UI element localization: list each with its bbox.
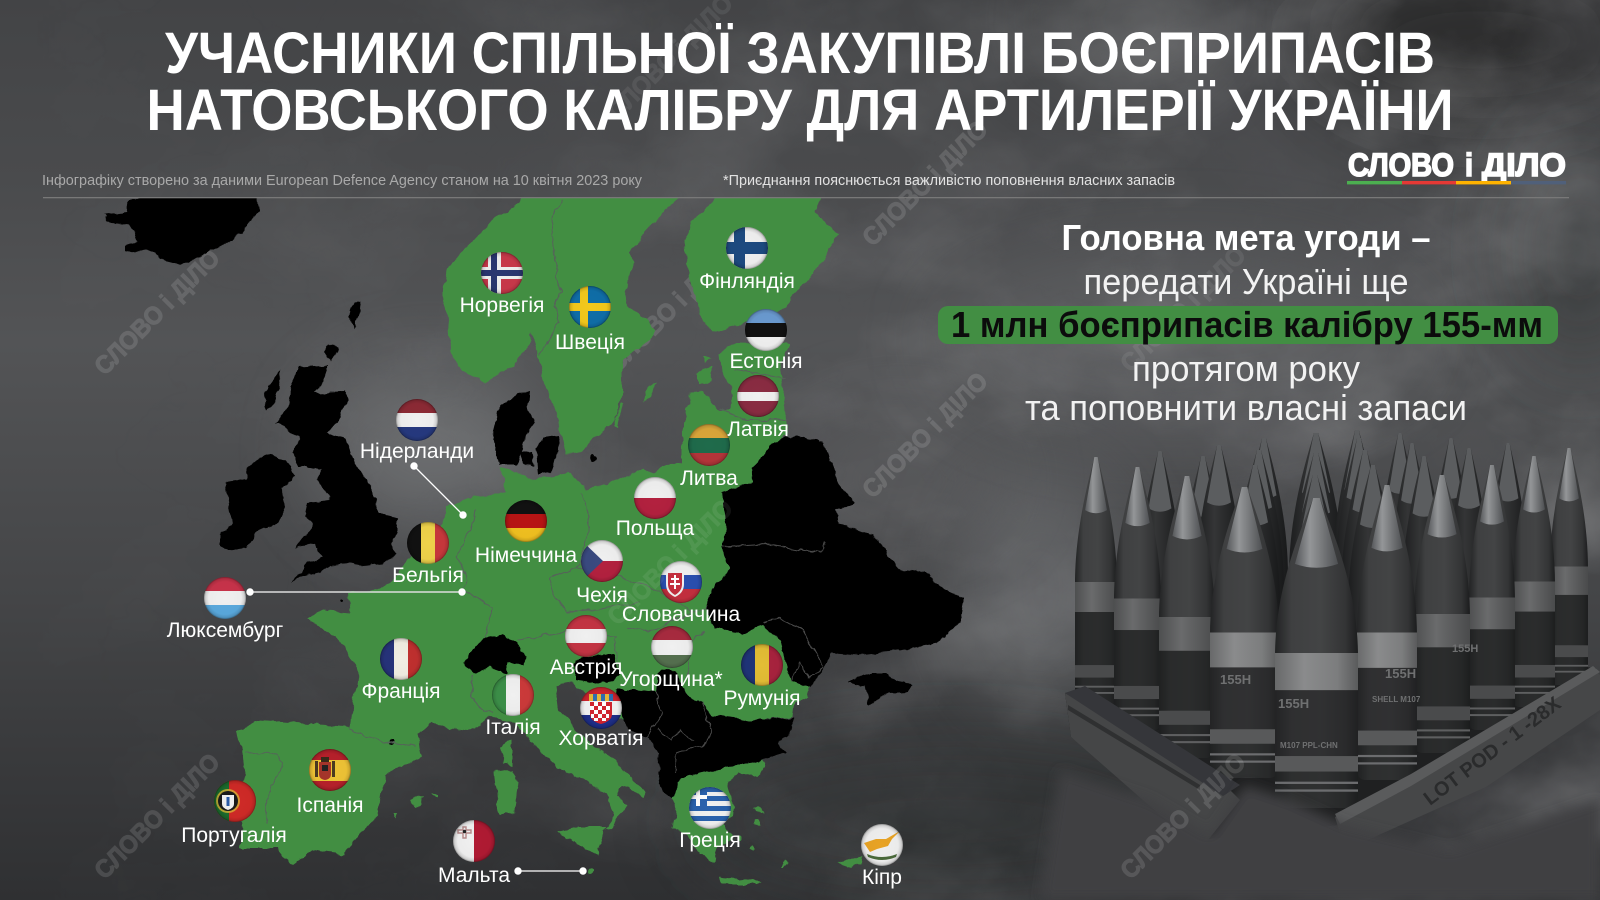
country: Угорщина: Угорщина* (619, 668, 723, 691)
back rows of shells (1138, 430, 1528, 755)
country: Нідерланди (360, 399, 474, 463)
country: Мальта (438, 820, 510, 887)
watermarks: СЛОВО і ДІЛО (857, 367, 994, 504)
country: Люксембург (167, 577, 284, 642)
country: Литва: Литва (680, 467, 738, 490)
shell markings: SHELL M107 (1372, 695, 1421, 704)
country: Чехія (578, 540, 626, 602)
watermarks over map and image: СЛОВО і ДІЛО (602, 494, 739, 631)
country: Люксембург: Люксембург (167, 619, 284, 642)
highlight: 1 млн боєприпасів: 1 млн боєприпасів калібру 155-мм (951, 304, 1543, 345)
logo: Слово і Діло: СЛОВО (1348, 147, 1454, 183)
shell markings: 155H (1220, 672, 1251, 687)
country: Польща (616, 477, 695, 540)
country: Хорватія: Хорватія (559, 727, 643, 750)
connector: Люксембург (246, 588, 466, 596)
country: Словаччина: Словаччина (622, 603, 740, 626)
country: Нідерланди: Нідерланди (360, 440, 474, 463)
country: Кіпр: Кіпр (862, 866, 902, 889)
image: artillery shells in crate (1040, 430, 1600, 900)
callout: main goal (938, 217, 1558, 428)
country: Бельгія (394, 522, 462, 582)
country: Німеччина: Німеччина (475, 544, 577, 567)
country: Норвегія: Норвегія (460, 294, 544, 317)
title: НАТОВСЬКОГО КАЛІБРУ ДЛЯ АРТИЛЕРІЇ УКРАЇНИ (146, 78, 1454, 143)
logo: Слово і Діло: ДІЛО (1482, 147, 1566, 183)
country: Словаччина (622, 561, 740, 626)
country: Італія: Італія (485, 716, 541, 739)
logo: Слово і Діло (1347, 147, 1566, 184)
shell markings: 155H (1278, 696, 1309, 711)
crate marking: LOT POD - 1 -28X (1420, 692, 1566, 810)
country: Іспанія (298, 749, 362, 812)
title: УЧАСНИКИ СПІЛЬНОЇ ЗАКУПІВЛІ БОЄПРИПАСІВ (165, 21, 1435, 86)
country: Фінляндія: Фінляндія (699, 270, 795, 293)
country: Бельгія: Бельгія (392, 564, 464, 587)
country: Хорватія (559, 687, 643, 750)
watermarks: СЛОВО і ДІЛО (89, 244, 226, 381)
country: Італія (487, 674, 540, 734)
country: Швеція (555, 286, 625, 354)
country: Латвія: Латвія (727, 418, 789, 441)
watermarks: СЛОВО і ДІЛО (602, 241, 739, 378)
country: Румунія: Румунія (723, 687, 801, 710)
country: Греція (679, 787, 741, 852)
country: Норвегія (460, 252, 544, 317)
shell markings: 155H (1452, 643, 1478, 655)
callout: main goal: передати Україні ще (1084, 261, 1408, 302)
country: Кіпр (861, 824, 903, 889)
shell markings: 155H (1385, 666, 1416, 681)
country: Чехія: Чехія (576, 584, 628, 607)
footnote: *Приєднання пояснюється важливістю поповнення власних запасів (723, 172, 1175, 189)
title (146, 21, 1454, 143)
logo: Слово і Діло: і (1465, 147, 1473, 183)
country: Фінляндія (699, 227, 795, 293)
callout: main goal: та поповнити власні запаси (1025, 387, 1467, 428)
country: Австрія (550, 615, 622, 679)
country: Мальта: Мальта (438, 864, 510, 887)
country: Німеччина (475, 500, 577, 567)
country: Угорщина (619, 626, 723, 691)
country: Швеція: Швеція (555, 331, 625, 354)
crate rails (1065, 693, 1240, 850)
country: Румунія (723, 644, 801, 710)
country: Естонія (731, 309, 802, 368)
watermarks (89, 0, 1252, 504)
non-participants: black countries (105, 195, 965, 798)
shell markings (1220, 643, 1478, 750)
country: Португалія: Португалія (181, 824, 287, 847)
watermarks over map and image (89, 494, 1252, 885)
watermarks over map and image: СЛОВО і ДІЛО (1115, 748, 1252, 885)
country: Греція: Греція (679, 829, 741, 852)
country: Литва (680, 424, 738, 490)
country: Польща: Польща (616, 517, 695, 540)
crate base (1065, 640, 1600, 840)
watermarks: СЛОВО і ДІЛО (857, 115, 994, 252)
Switzerland, Slovenia, Andorra (390, 635, 620, 744)
country: Франція: Франція (362, 680, 440, 703)
participants: green countries (236, 195, 863, 885)
shell markings: M107 PPL-CHN (1280, 741, 1338, 750)
watermarks: СЛОВО і ДІЛО (1115, 241, 1252, 378)
country: Естонія: Естонія (730, 350, 802, 373)
connector: Мальта (514, 867, 587, 875)
country: Латвія (727, 375, 789, 441)
callout: main goal: Головна мета угоди – (1062, 217, 1430, 258)
front row of shells (1075, 448, 1588, 808)
country: Франція (362, 638, 440, 703)
country: Іспанія: Іспанія (296, 794, 364, 817)
watermarks over map and image: СЛОВО і ДІЛО (89, 748, 226, 885)
connector: Нідерланди (410, 462, 467, 519)
country: Португалія (181, 780, 287, 847)
mist over crate bottom (1040, 770, 1600, 900)
country: Австрія: Австрія (550, 656, 622, 679)
callout: main goal: протягом року (1132, 348, 1360, 389)
map of Europe (105, 195, 965, 885)
source note: Інфографіку створено за даними European Defence Agency станом на 10 квітня 2023 року (42, 172, 642, 189)
country borders (245, 200, 825, 823)
